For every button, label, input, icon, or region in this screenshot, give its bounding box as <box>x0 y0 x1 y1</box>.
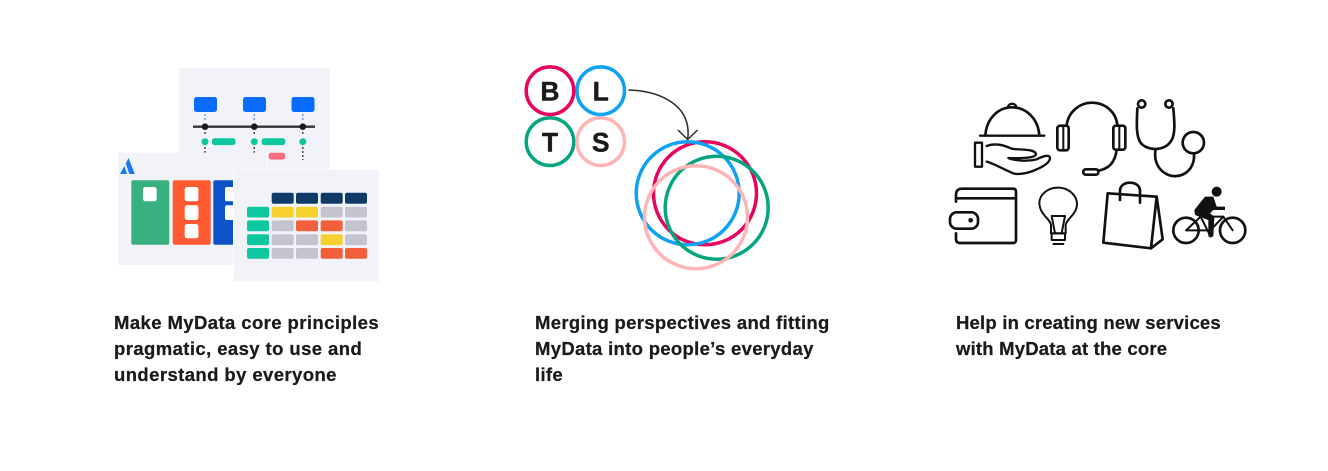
caption: tools: pragmatic, easy to use and <box>114 338 362 359</box>
caption: tools <box>114 312 379 386</box>
icon: stethoscope <box>1137 100 1204 176</box>
caption: services <box>956 312 1221 360</box>
arrow <box>628 90 698 140</box>
letter circle: T: T <box>542 127 558 157</box>
illustration: service icons <box>950 100 1245 248</box>
caption: perspectives: life <box>535 364 563 385</box>
letter circle: S: S <box>592 127 610 157</box>
panel: kanban board <box>118 153 267 265</box>
merged circles <box>636 142 768 269</box>
illustration: MyData tools collage <box>118 68 379 282</box>
icon: cyclist <box>1173 187 1245 243</box>
panel: matrix table <box>233 169 379 282</box>
letter circle: B: B <box>540 76 560 106</box>
illustration: merging perspectives circles <box>526 67 768 269</box>
caption: services: Help in creating new services <box>956 312 1221 333</box>
caption: perspectives <box>535 312 830 385</box>
icon: serving cloche on hand <box>975 104 1050 174</box>
letter circle: L: L <box>593 76 609 106</box>
icon: wallet <box>950 189 1016 243</box>
letter circle: L <box>577 67 624 114</box>
icon: headset <box>1057 103 1125 175</box>
icon: light bulb <box>1039 188 1077 244</box>
letter circle: B <box>526 67 574 114</box>
icon: logo <box>120 158 135 174</box>
caption: perspectives: MyData into people’s everyday <box>535 338 814 359</box>
caption: services: with MyData at the core <box>956 338 1167 359</box>
caption: perspectives: Merging perspectives and fitting <box>535 312 830 333</box>
caption: tools: Make MyData core principles <box>114 312 379 333</box>
letter circle: T <box>526 118 574 166</box>
caption: tools: understand by everyone <box>114 364 337 385</box>
icon: shopping bag <box>1103 183 1163 248</box>
letter circle: S <box>577 118 624 166</box>
panel: timeline <box>179 68 330 170</box>
